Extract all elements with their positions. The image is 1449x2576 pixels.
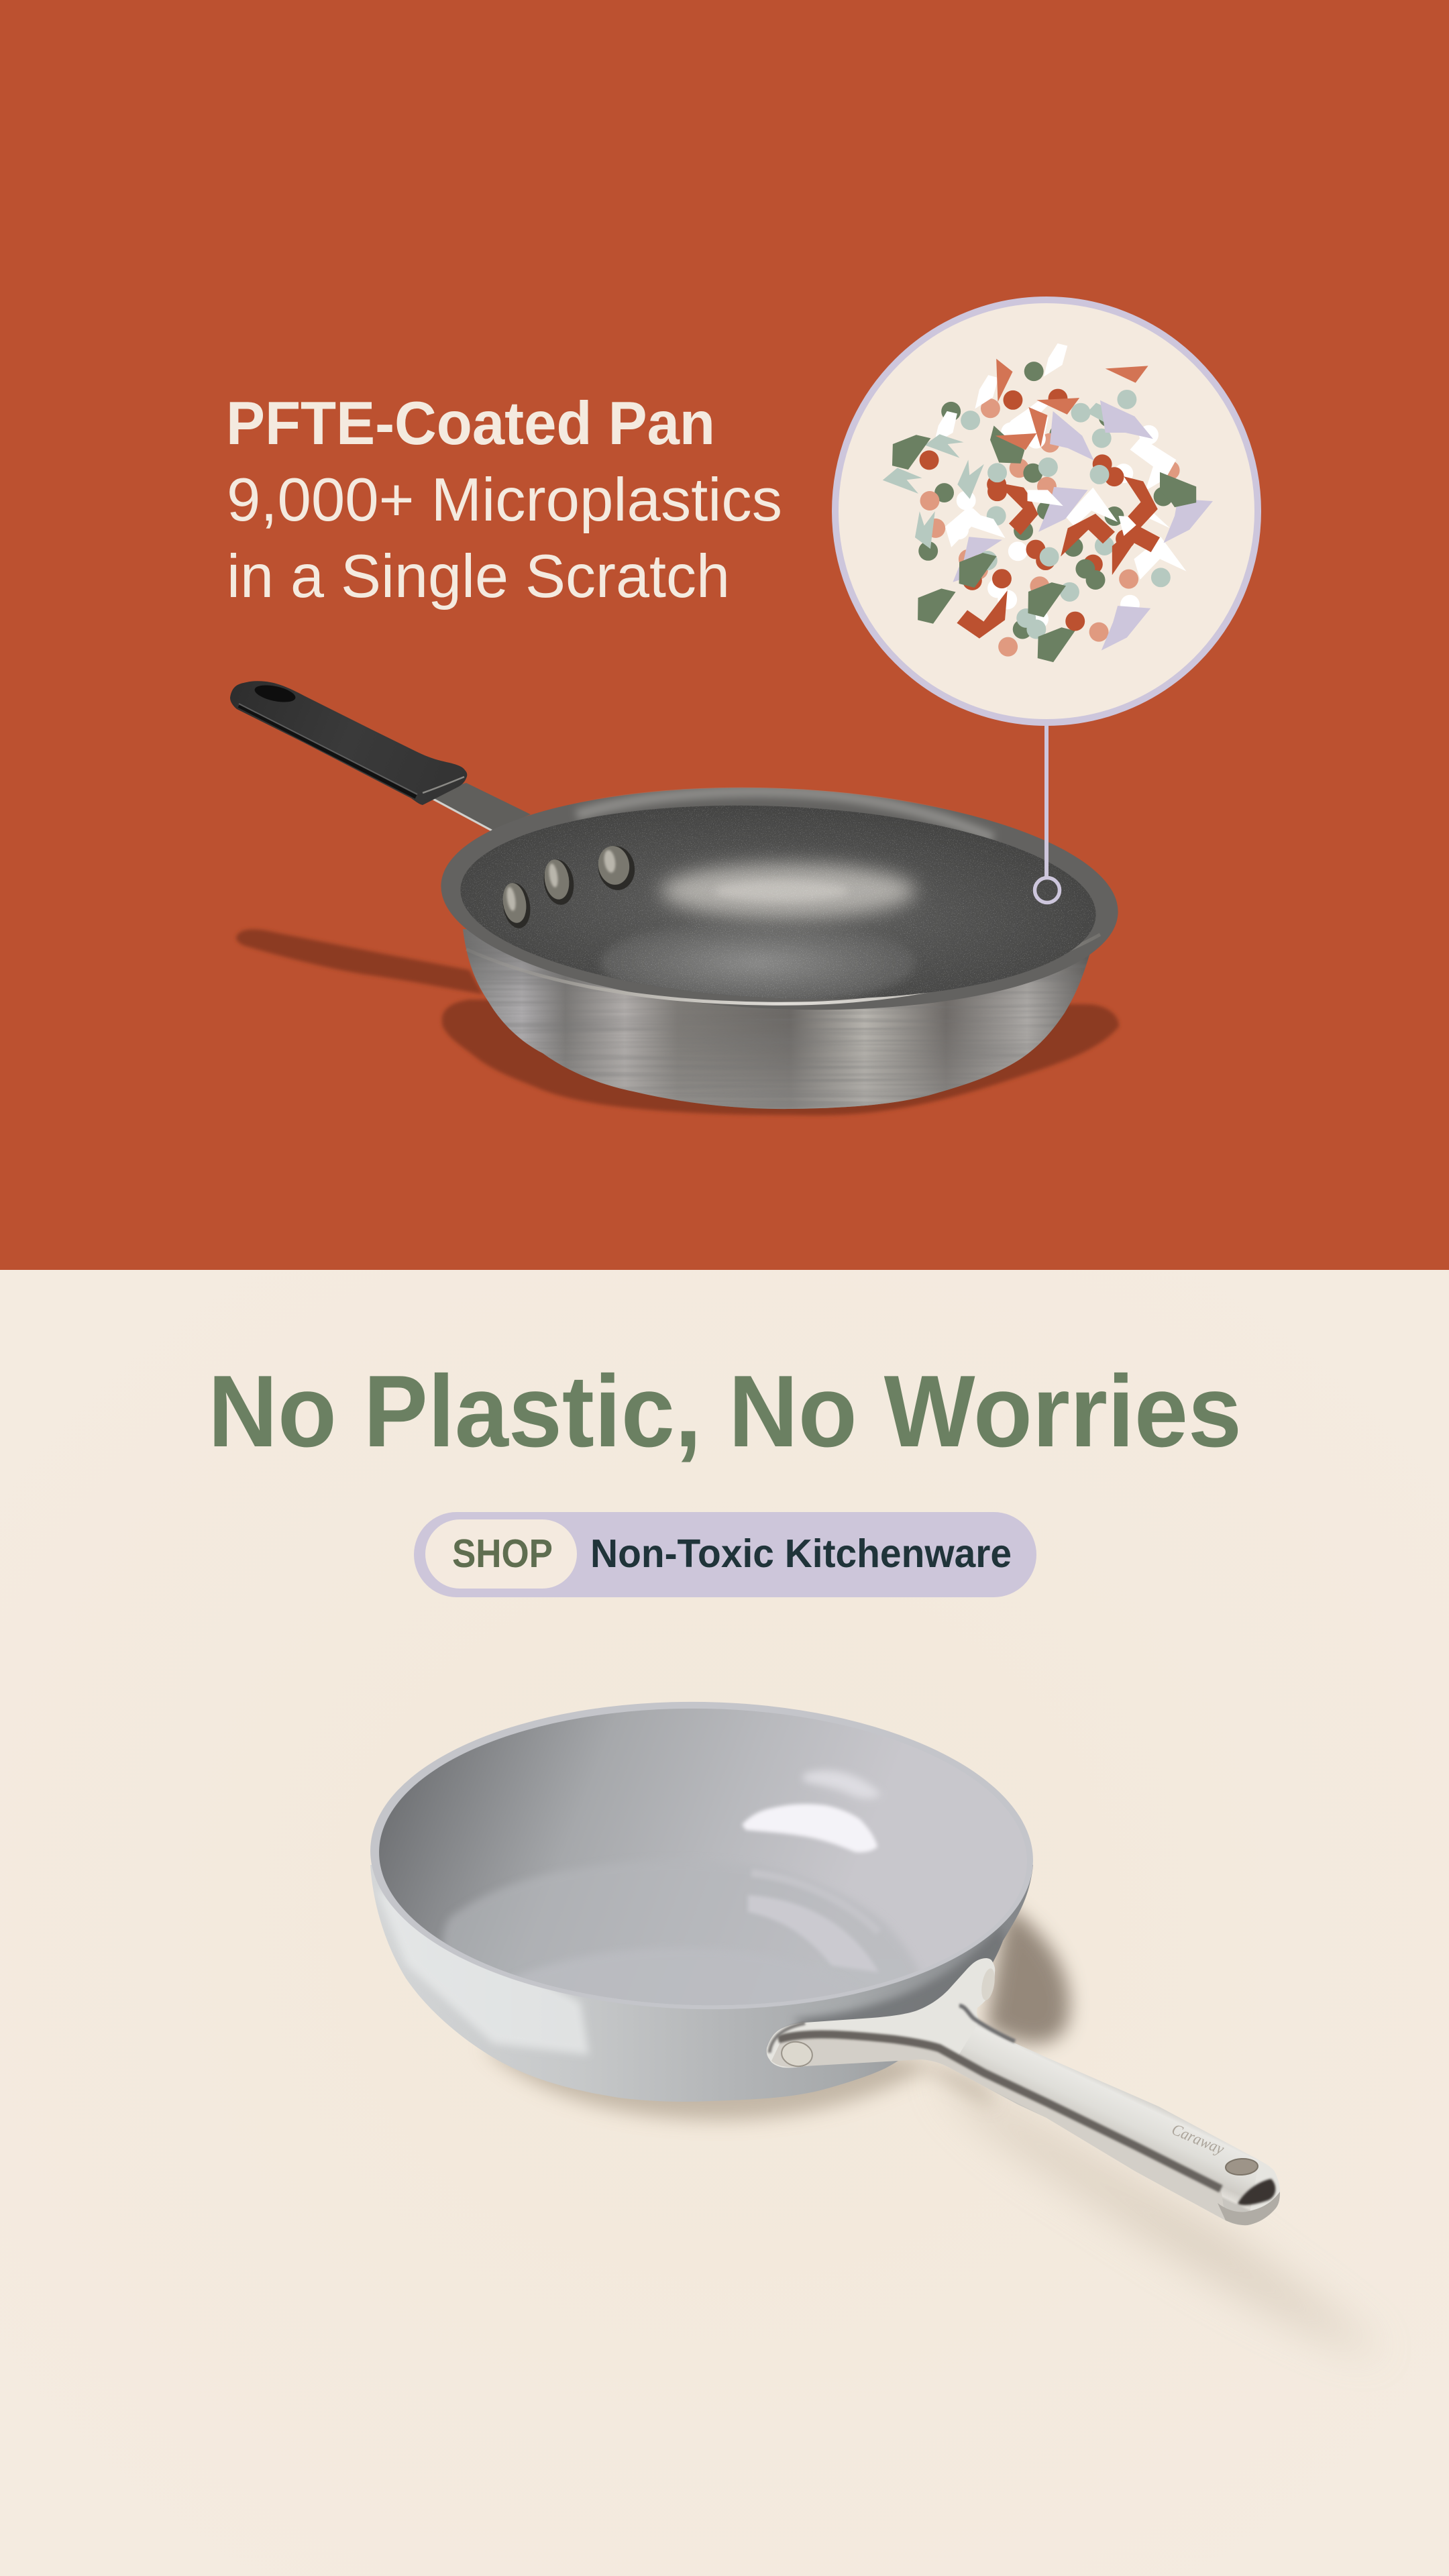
pan rim: [441, 788, 1118, 1010]
bracket edge reflection: [769, 2023, 805, 2053]
interior floor shading: [441, 1876, 916, 1988]
bracket lower band: [771, 2035, 1226, 2220]
handle dark reflection: [778, 2034, 1221, 2189]
callout: microplastics magnified circle: [835, 300, 1258, 722]
pan rivets: [500, 843, 638, 930]
pan handle grip: [230, 681, 467, 805]
panel: PTFE-coated pan: [0, 0, 1449, 1270]
text: microplastics statement: 9,000+ Microplastics: [227, 466, 782, 534]
button label: Non-Toxic Kitchenware: [590, 1532, 1012, 1576]
heading: No Plastic, No Worries: No Plastic, No Worries: [208, 1354, 1242, 1468]
callout: scratch pointer line: [1034, 723, 1060, 903]
text: microplastics statement: in a Single Scratch: [227, 543, 730, 610]
ceramic pan rim: [368, 1696, 1036, 2015]
ceramic pan interior: [376, 1703, 1030, 2010]
button: shop non-toxic kitchenware: [414, 1512, 1036, 1597]
handle end cap: [1218, 2192, 1280, 2225]
pan interior: [456, 793, 1100, 1012]
button: shop pill: [425, 1519, 577, 1589]
pan highlight: [661, 864, 916, 918]
shadow: coated pan: [236, 929, 1119, 1116]
illustration: coated frying pan: [230, 681, 1122, 1120]
pan body: [463, 929, 1089, 1110]
handle end hole: [1225, 2158, 1258, 2176]
neck dark reflection: [959, 2006, 1015, 2041]
handle shaft shading: [951, 2021, 1259, 2225]
bracket rivet: [780, 2039, 814, 2069]
pan speckled coating: [456, 802, 1100, 1003]
button: shop pill: SHOP: [452, 1532, 553, 1576]
microplastic particles: [883, 343, 1213, 662]
shadows: ceramic pan: [483, 1905, 1382, 2355]
pan handle tang: [425, 783, 531, 830]
upper rivet: [979, 1968, 997, 2001]
interior highlights: [742, 1804, 877, 1852]
illustration: ceramic pan: [362, 1696, 1280, 2225]
heading: PFTE-Coated Pan: PFTE-Coated Pan: [226, 390, 715, 458]
pan floor: [600, 927, 914, 999]
ceramic pan body: [362, 1858, 1040, 2106]
handle end reflection: [1238, 2179, 1275, 2205]
text: microplastics statement: [227, 466, 782, 610]
panel: non-toxic kitchenware: [215, 1373, 1356, 2348]
engraved brand: Caraway: [1169, 2121, 1227, 2159]
steel handle: [767, 1958, 1280, 2225]
